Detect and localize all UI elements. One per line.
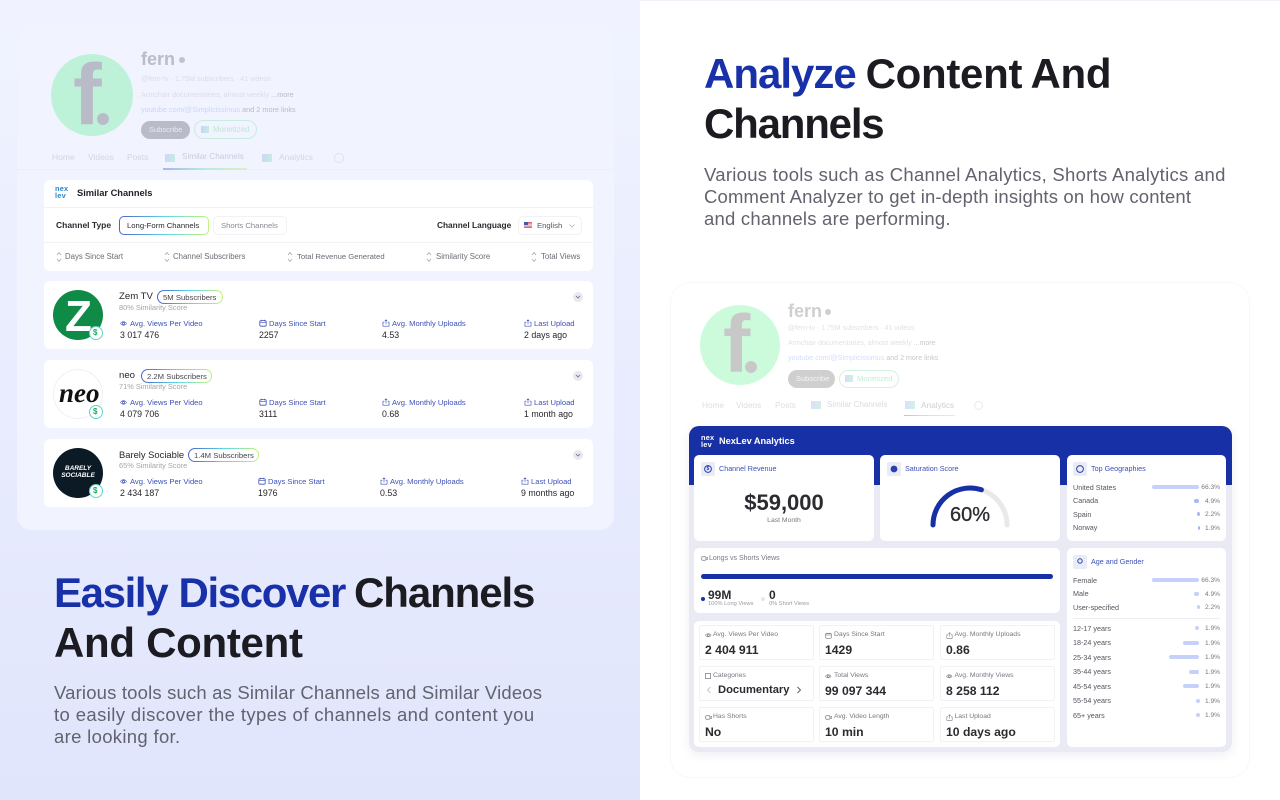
metric: categories: Categories xyxy=(713,672,746,679)
channel info block: Armchair documentaries, almost weekly ...more xyxy=(788,340,935,347)
channel card: neo: 2.2M Subscribers xyxy=(147,372,207,380)
channel card: Zem TV: $ xyxy=(93,328,97,337)
card: longs vs shorts views: 0% Short Views xyxy=(769,601,809,607)
heading: discover xyxy=(54,569,534,666)
channel card: Zem TV: Last Upload xyxy=(534,318,575,328)
heading: discover: And Content xyxy=(54,618,303,666)
card: age and gender: 65+ years xyxy=(1073,710,1105,720)
channel avatar fern xyxy=(51,54,133,136)
card: age and gender: 1.9% xyxy=(1205,654,1220,661)
card: age and gender: 1.9% xyxy=(1205,640,1220,646)
channel card: Barely Sociable: $ xyxy=(93,486,97,495)
channel language filter: English xyxy=(537,220,562,230)
metric: avg video length: 10 min xyxy=(825,724,864,738)
analytics header: nex xyxy=(701,433,714,442)
channel card: Barely Sociable: 9 months ago xyxy=(521,488,574,498)
channel card: Barely Sociable: 1.4M Subscribers xyxy=(194,450,254,460)
card: age and gender: 1.9% xyxy=(1205,625,1220,632)
metric: last upload xyxy=(940,707,1055,742)
card: longs vs shorts views: 99M xyxy=(708,588,731,602)
channel language filter: Channel Language xyxy=(437,220,511,230)
channel card: neo: Days Since Start xyxy=(269,398,326,406)
channel card: Zem TV: Avg. Views Per Video xyxy=(130,318,203,328)
channel card: neo: 4 079 706 xyxy=(120,409,159,419)
metric: has shorts: No xyxy=(705,724,721,738)
card: saturation score: Saturation Score xyxy=(905,464,959,473)
channel language filter xyxy=(437,216,582,235)
metric: last upload: 10 days ago xyxy=(946,724,1016,738)
card: age and gender: 45-54 years xyxy=(1073,682,1111,690)
card: age and gender: 1.9% xyxy=(1205,698,1220,704)
panel: NexLev Analytics xyxy=(689,426,1232,752)
metric: avg video length: Avg. Video Length xyxy=(834,713,889,720)
card: age and gender: 35-44 years xyxy=(1073,667,1111,676)
channel card: neo: Avg. Monthly Uploads xyxy=(392,398,466,406)
card: age and gender: 12-17 years xyxy=(1073,624,1111,632)
channel card: Zem TV: 4.53 xyxy=(382,330,399,340)
panel: similar channels filter card xyxy=(44,180,593,271)
text: analyze description: and channels are performing. xyxy=(704,208,951,229)
card: age and gender: Female xyxy=(1073,576,1097,584)
channel info block: @fern-tv · 1.75M subscribers · 41 videos xyxy=(141,74,271,82)
channel card: Barely Sociable: BARELY SOCIABLE xyxy=(61,465,95,479)
channel avatar fern xyxy=(700,305,780,385)
card: age and gender xyxy=(1067,548,1226,747)
channel info block: youtube.com/@Simplicissimus and 2 more links xyxy=(788,354,938,362)
channel info block: Armchair documentaries, almost weekly ...more xyxy=(141,90,294,98)
sort columns: Total Revenue Generated xyxy=(297,252,385,261)
card: top geographies: Spain xyxy=(1073,510,1091,518)
metric: total views: 99 097 344 xyxy=(825,684,886,698)
channel card: neo xyxy=(44,360,593,428)
card: channel revenue xyxy=(694,455,874,541)
channel tabs: Analytics xyxy=(279,152,313,162)
card: top geographies: 1.9% xyxy=(1205,524,1220,532)
channel tabs: Home xyxy=(702,400,724,410)
logo: nex xyxy=(55,184,68,193)
metric: avg monthly views xyxy=(940,666,1055,701)
heading: discover: Easily Discover Channels xyxy=(54,569,534,616)
sort columns: Similarity Score xyxy=(436,252,490,261)
channel card: Zem TV xyxy=(44,281,593,349)
channel info block: Subscribe xyxy=(149,125,182,134)
channel tabs: Posts xyxy=(775,400,796,410)
metric: avg monthly uploads: 0.86 xyxy=(946,642,970,656)
card: channel revenue: $59,000 xyxy=(744,490,824,514)
channel info block: Subscribe xyxy=(796,374,829,383)
panel: left discover background xyxy=(0,0,640,800)
metric: avg monthly uploads xyxy=(940,625,1055,660)
text: discover description: Various tools such as Similar Channels and Similar Videos xyxy=(54,682,542,703)
panel: analytics page mockup xyxy=(670,282,1250,778)
channel card: neo: 0.68 xyxy=(382,409,399,419)
logo xyxy=(55,184,68,200)
channel card: Barely Sociable: Barely Sociable xyxy=(119,449,184,460)
channel info block xyxy=(788,301,938,388)
channel tabs: Home xyxy=(52,152,75,162)
text: analyze description xyxy=(704,164,1226,229)
channel card: Barely Sociable: Avg. Views Per Video xyxy=(130,476,203,486)
metric: categories xyxy=(699,666,814,701)
text: discover description xyxy=(54,682,542,747)
channel tabs: Videos xyxy=(736,400,761,410)
metric: avg monthly views: 8 258 112 xyxy=(946,684,1000,698)
metric: has shorts: Has Shorts xyxy=(713,713,747,720)
metric: days since start: Days Since Start xyxy=(834,631,885,638)
sort columns: Channel Subscribers xyxy=(173,252,245,261)
heading: analyze: Analyze Content And xyxy=(704,50,1111,97)
sort columns: Days Since Start xyxy=(65,252,123,261)
channel card: neo: 1 month ago xyxy=(524,409,573,419)
channel card: neo: neo xyxy=(119,370,135,381)
channel card: Barely Sociable: 1976 xyxy=(258,488,278,498)
channel card: Zem TV: 2 days ago xyxy=(524,330,567,340)
gauge xyxy=(930,486,1010,528)
channel card: neo: Last Upload xyxy=(534,398,575,406)
card: age and gender: 18-24 years xyxy=(1073,638,1111,647)
channel type filter xyxy=(56,216,287,235)
channel info block xyxy=(141,49,296,139)
card: age and gender: User-specified xyxy=(1073,602,1119,612)
logo: lev xyxy=(55,191,66,200)
metric: total views xyxy=(819,666,934,701)
card: longs vs shorts views: 0 xyxy=(769,588,776,602)
channel card: neo: neo xyxy=(59,378,100,408)
channel info block: fern xyxy=(788,301,822,321)
metric: avg views per video: Avg. Views Per Video xyxy=(713,631,778,638)
panel: channel page mockup xyxy=(17,30,614,530)
card: top geographies: Norway xyxy=(1073,523,1097,532)
channel card: Zem TV: Avg. Monthly Uploads xyxy=(392,318,466,328)
card: age and gender: 1.9% xyxy=(1205,683,1220,690)
text: discover description: to easily discover the types of channels and content you xyxy=(54,704,535,725)
channel card: Zem TV: Days Since Start xyxy=(269,318,326,328)
card: top geographies: 4.9% xyxy=(1205,498,1220,504)
metric: avg monthly uploads: Avg. Monthly Uploads xyxy=(954,631,1020,638)
sort columns xyxy=(56,252,580,262)
card: age and gender: 4.9% xyxy=(1205,590,1220,598)
card: top geographies xyxy=(1067,455,1226,541)
channel tabs: Similar Channels xyxy=(182,152,244,161)
channel card: Zem TV: 80% Similarity Score xyxy=(119,303,187,312)
text: analyze description: Comment Analyzer to get in-depth insights on how content xyxy=(704,186,1191,207)
metric: avg monthly views: Avg. Monthly Views xyxy=(954,672,1014,679)
channel info block: youtube.com/@Simplicissimus and 2 more links xyxy=(141,104,296,114)
card: channel revenue: Last Month xyxy=(767,517,801,524)
card: longs vs shorts views: 100% Long Views xyxy=(708,601,753,607)
card: saturation score: 60% xyxy=(950,504,990,526)
card: channel revenue: $ xyxy=(706,466,709,472)
channel tabs xyxy=(702,400,983,416)
channel card: Barely Sociable xyxy=(44,439,593,507)
channel card: neo: 71% Similarity Score xyxy=(119,382,187,391)
metric: avg video length xyxy=(819,707,934,742)
metric: avg views per video: 2 404 911 xyxy=(705,642,759,656)
channel card: Zem TV: Z xyxy=(65,292,92,340)
channel type filter: Shorts Channels xyxy=(221,220,278,230)
card: age and gender: Age and Gender xyxy=(1091,557,1144,566)
card: top geographies: United States xyxy=(1073,482,1116,492)
heading: analyze: Channels xyxy=(704,100,883,147)
text: discover description: are looking for. xyxy=(54,726,180,747)
metric: last upload: Last Upload xyxy=(954,713,991,720)
channel tabs: Videos xyxy=(88,152,114,162)
card: longs vs shorts views: Longs vs Shorts Views xyxy=(709,554,780,562)
channel info block: @fern-tv · 1.75M subscribers · 41 videos xyxy=(788,325,915,332)
channel tabs xyxy=(17,150,614,170)
card: age and gender: 66.3% xyxy=(1201,577,1220,584)
card: saturation score xyxy=(880,455,1060,541)
metric: avg views per video xyxy=(699,625,814,660)
card: top geographies: 66.3% xyxy=(1201,484,1220,491)
channel tabs: Analytics xyxy=(921,400,954,410)
card: longs vs shorts views xyxy=(694,548,1060,613)
card: age and gender: 1.9% xyxy=(1205,712,1220,719)
channel info block: fern xyxy=(141,49,175,69)
channel card: Barely Sociable: 2 434 187 xyxy=(120,488,159,498)
metric: categories: Documentary xyxy=(718,684,790,696)
card: top geographies: Canada xyxy=(1073,496,1098,505)
metric: total views: Total Views xyxy=(834,672,868,679)
channel tabs: Posts xyxy=(127,152,148,162)
channel card: neo: $ xyxy=(93,407,97,416)
analytics header: lev xyxy=(701,440,712,449)
card: age and gender: Male xyxy=(1073,589,1089,598)
card: age and gender: 2.2% xyxy=(1205,604,1220,611)
hairline: top of right side xyxy=(640,0,1280,1)
channel card: Barely Sociable: Last Upload xyxy=(531,476,572,486)
card: top geographies: 2.2% xyxy=(1205,511,1220,518)
card: top geographies: Top Geographies xyxy=(1091,464,1146,473)
card: age and gender: 25-34 years xyxy=(1073,652,1111,662)
card: age and gender: 55-54 years xyxy=(1073,696,1111,705)
analytics header: NexLev Analytics xyxy=(719,436,795,446)
channel card: Barely Sociable: 65% Similarity Score xyxy=(119,461,187,470)
channel card: Barely Sociable: 0.53 xyxy=(380,488,397,498)
channel card: Barely Sociable: Days Since Start xyxy=(268,476,325,486)
channel card: Zem TV: Zem TV xyxy=(119,291,153,302)
channel tabs: Similar Channels xyxy=(827,400,887,409)
channel info block: Monetized xyxy=(213,125,249,134)
channel card: Zem TV: 3 017 476 xyxy=(120,330,159,340)
channel card: Zem TV: 2257 xyxy=(259,330,279,340)
card: channel revenue: Channel Revenue xyxy=(719,464,777,473)
sort columns: Total Views xyxy=(541,252,580,261)
channel info block: Monetized xyxy=(857,374,892,383)
channel type filter: Channel Type xyxy=(56,220,111,230)
metric: has shorts xyxy=(699,707,814,742)
card: age and gender: 1.9% xyxy=(1205,668,1220,676)
card title: Similar Channels xyxy=(77,188,152,198)
text: analyze description: Various tools such as Channel Analytics, Shorts Analytics and xyxy=(704,164,1226,185)
channel card: neo: 3111 xyxy=(259,409,277,419)
metric: days since start xyxy=(819,625,934,660)
card: channel metrics xyxy=(694,621,1060,747)
channel card: neo: Avg. Views Per Video xyxy=(130,398,203,406)
metric: days since start: 1429 xyxy=(825,642,852,656)
channel type filter: Long-Form Channels xyxy=(127,220,199,230)
channel card: Barely Sociable: Avg. Monthly Uploads xyxy=(390,476,464,486)
analytics header xyxy=(701,433,795,449)
channel card: Zem TV: 5M Subscribers xyxy=(163,292,216,302)
heading: analyze xyxy=(704,50,1111,147)
